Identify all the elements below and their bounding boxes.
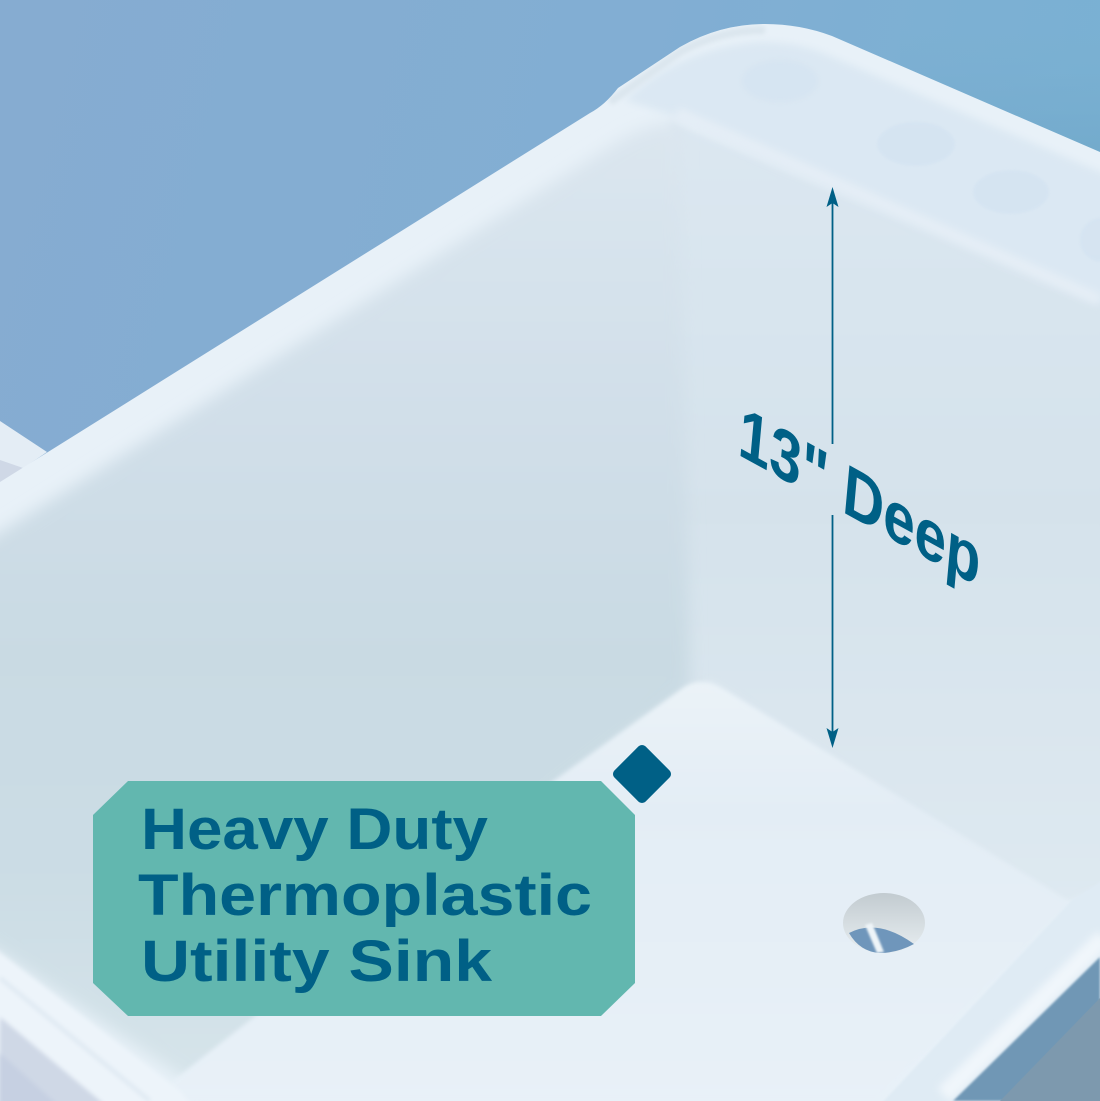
cabinet below sink (1000, 998, 1100, 1101)
rear ridge highlight (677, 113, 1100, 300)
lower left shade (0, 1056, 48, 1101)
diamond icon (611, 743, 673, 805)
callout heading: Heavy Duty (141, 797, 488, 862)
depth label: 13" Deep (736, 391, 984, 602)
callout heading: Utility Sink (141, 929, 493, 994)
depth arrow (826, 187, 838, 748)
sink floor (182, 682, 706, 1086)
front right underside (953, 957, 1100, 1101)
rear rim surface (632, 44, 1100, 292)
right interior wall (682, 130, 1100, 898)
front left rim (0, 953, 77, 1016)
front left underside (0, 1017, 105, 1101)
callout panel (93, 781, 635, 1016)
left interior wall (0, 123, 690, 1090)
rim circles (742, 60, 1100, 262)
drain (843, 893, 925, 953)
counter edge (0, 421, 47, 484)
front right rim (886, 899, 1100, 1101)
front right rim highlight (944, 938, 1100, 1095)
rim fold highlight (610, 30, 765, 102)
front left ridge (0, 978, 150, 1101)
callout heading: Thermoplastic (138, 863, 592, 928)
teal callout (93, 781, 635, 1016)
